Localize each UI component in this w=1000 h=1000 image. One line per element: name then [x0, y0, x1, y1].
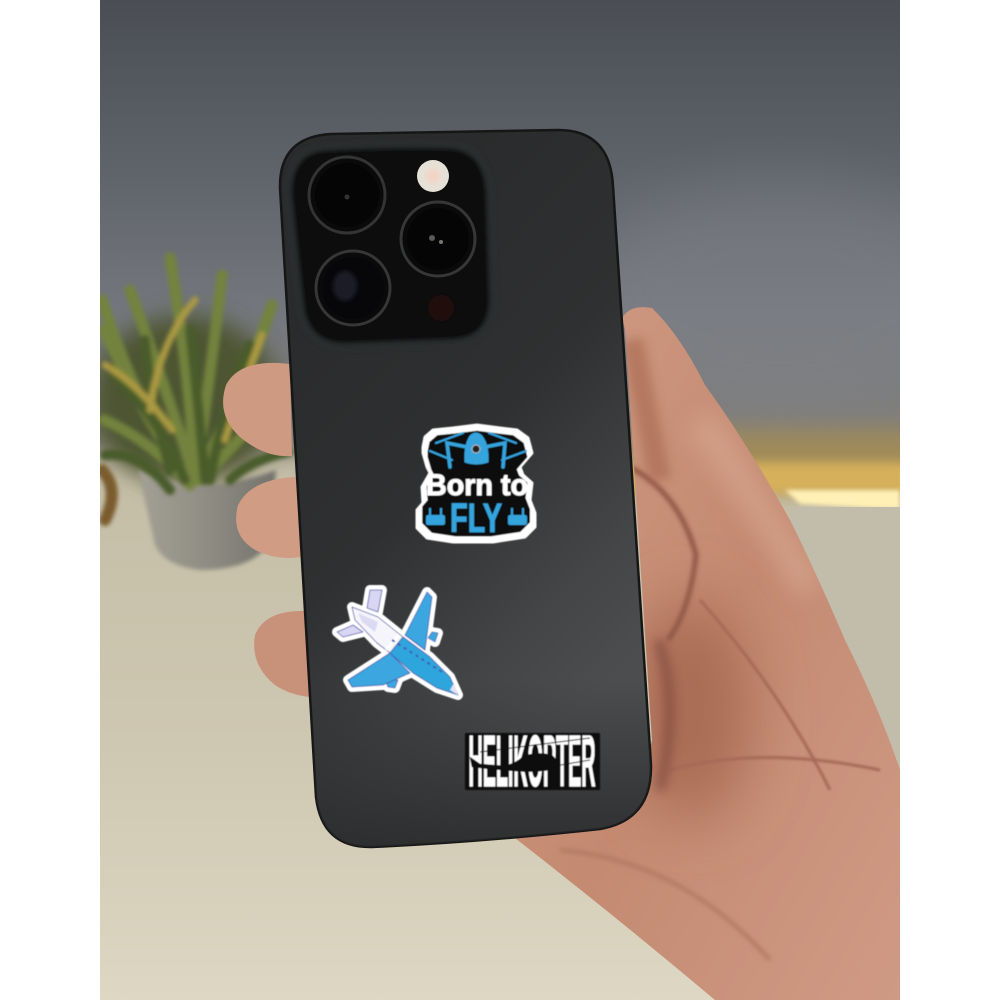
lens: right: [401, 202, 475, 276]
lens: top left: [309, 157, 385, 233]
hand: index finger: [223, 363, 292, 456]
window line: [392, 640, 442, 672]
icon: drone: [430, 433, 526, 467]
sticker outline: [337, 590, 458, 695]
hand: shading creases: [560, 340, 880, 960]
sticker outline: [417, 425, 535, 542]
nose cone: [450, 683, 458, 695]
camera plateau: [288, 144, 493, 347]
sticker: Helikopter: [464, 732, 600, 790]
hand: middle finger: [236, 477, 305, 558]
white stripe: [386, 635, 399, 650]
plant foliage: [102, 258, 288, 520]
photo scene: HELIKOPTER: [468, 722, 596, 802]
plant foliage backdrop: [90, 315, 280, 485]
sticker: Born to Fly: [417, 425, 535, 542]
lidar sensor: [428, 295, 454, 321]
icon: helicopter silhouette: [470, 738, 590, 772]
sticker text: FLY: FLY: [450, 495, 502, 541]
photo scene: [100, 0, 900, 1000]
sticker background: [465, 733, 600, 790]
sticker black backing: [424, 432, 529, 535]
left wing: [348, 653, 410, 687]
right wing: [405, 592, 432, 650]
lens: bottom left: [316, 251, 390, 325]
tail fins: [337, 590, 382, 637]
tail fairing: [358, 613, 378, 632]
flash: [417, 160, 449, 192]
hand: ring finger: [254, 611, 310, 697]
icon: drone controllers: [426, 508, 527, 525]
fuselage front (blue): [390, 637, 458, 695]
sticker text: Born to: Born to: [426, 469, 528, 502]
hand: palm and thumb: [515, 307, 900, 1000]
background: table: [60, 455, 900, 1000]
phone body: [270, 130, 670, 860]
plant pot: [138, 470, 276, 570]
product photo illustration: [100, 0, 900, 1000]
background: warm lit shelf strip: [630, 430, 920, 807]
background: wall: [100, 0, 900, 472]
engines: [385, 632, 438, 688]
fuselage rear (white): [352, 607, 403, 653]
sticker: airplane: [337, 590, 458, 695]
